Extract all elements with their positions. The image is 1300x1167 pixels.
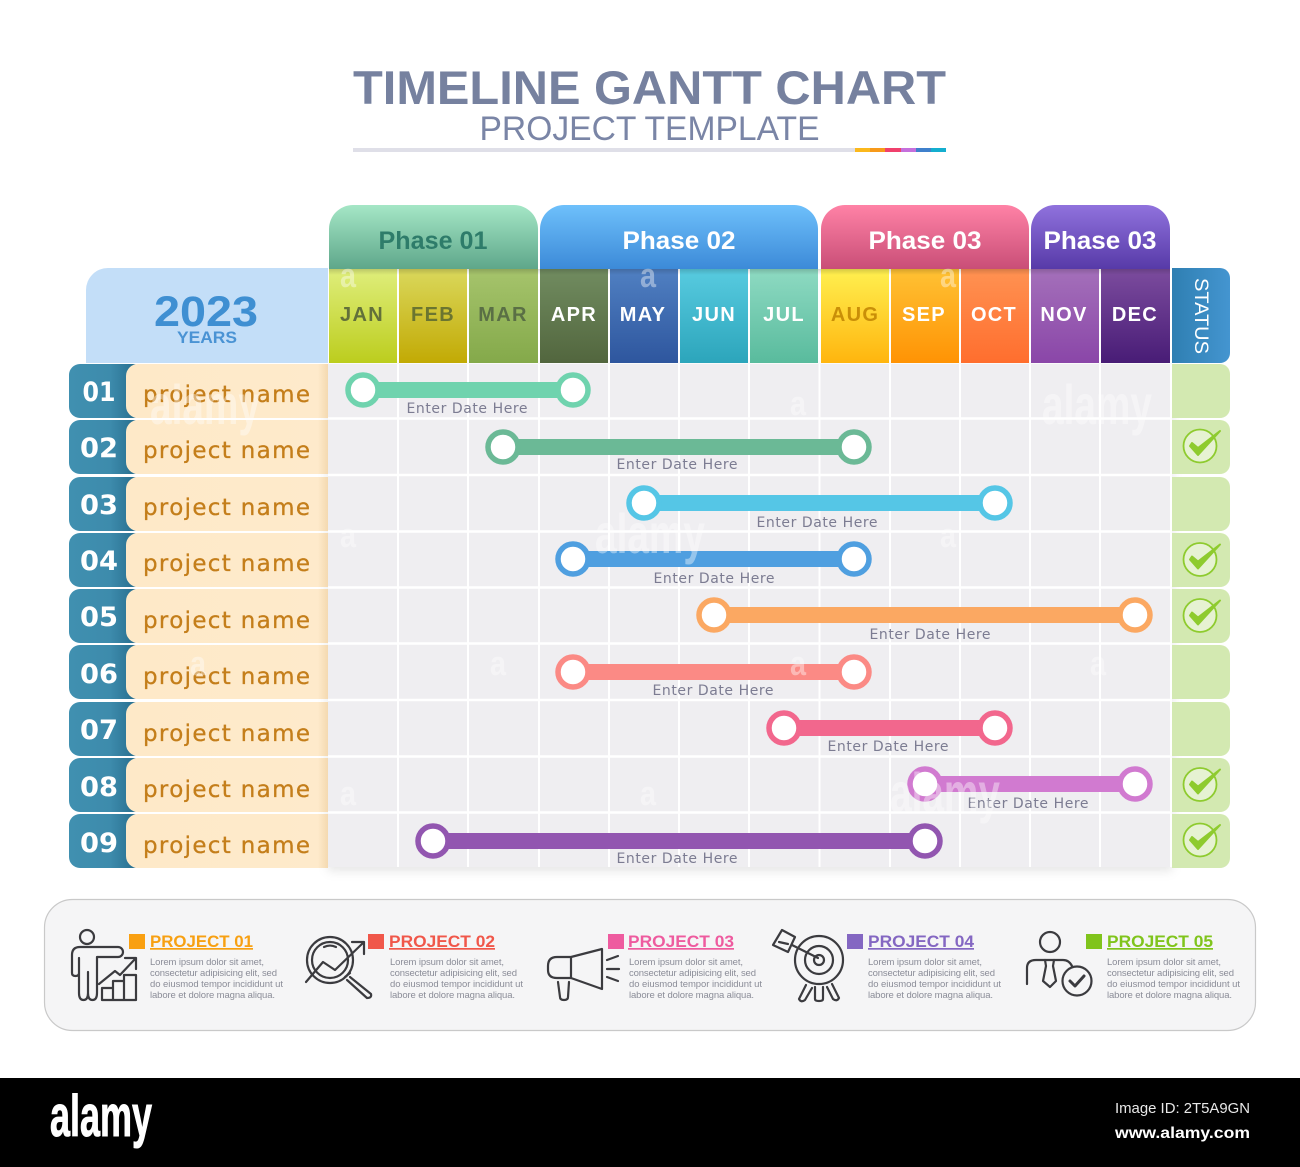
row 07: 07 bbox=[80, 715, 118, 746]
watermarks: a bbox=[640, 257, 657, 295]
bar row 07 bbox=[769, 713, 1010, 755]
row 05 bbox=[69, 589, 328, 643]
jun bbox=[680, 269, 748, 363]
watermarks: a bbox=[640, 775, 657, 813]
icon: target with arrow bbox=[773, 930, 843, 1001]
phase 03 bbox=[821, 205, 1029, 269]
gantt chart bbox=[69, 205, 1230, 868]
row 08: 08 bbox=[80, 772, 118, 803]
jul: JUL bbox=[763, 304, 805, 326]
heading: PROJECT 03 bbox=[628, 932, 734, 951]
description: Lorem ipsum dolor sit amet, bbox=[390, 957, 504, 968]
row 01 bbox=[69, 364, 328, 418]
row 02 bbox=[69, 420, 328, 474]
description: consectetur adipisicing elit, sed bbox=[868, 968, 995, 979]
jul bbox=[750, 269, 818, 363]
icon: magnifier with trend bbox=[306, 937, 371, 998]
row 09 bbox=[69, 814, 328, 868]
description: labore et dolore magna aliqua. bbox=[1107, 990, 1232, 1001]
colour square bbox=[368, 934, 384, 949]
watermarks: a bbox=[340, 517, 357, 555]
description: labore et dolore magna aliqua. bbox=[390, 990, 515, 1001]
row 04: project name bbox=[143, 551, 310, 577]
icon: person with check bbox=[1027, 932, 1092, 996]
bar row 02: Enter Date Here bbox=[616, 457, 738, 473]
description: do eiusmod tempor incididunt ut bbox=[1107, 979, 1240, 990]
bar row 03: Enter Date Here bbox=[756, 515, 878, 531]
sep bbox=[891, 269, 959, 363]
watermarks: a bbox=[1090, 645, 1107, 683]
row 05: project name bbox=[143, 608, 310, 634]
description: consectetur adipisicing elit, sed bbox=[390, 968, 517, 979]
bar row 08 bbox=[910, 769, 1150, 812]
row 01: project name bbox=[143, 382, 310, 408]
description: consectetur adipisicing elit, sed bbox=[150, 968, 277, 979]
panel: year bbox=[86, 268, 328, 363]
row 09: project name bbox=[143, 833, 310, 859]
description: Lorem ipsum dolor sit amet, bbox=[150, 957, 264, 968]
aug bbox=[821, 269, 889, 363]
legend item: project 03 bbox=[548, 932, 762, 1001]
row 03: 03 bbox=[80, 490, 118, 521]
dec bbox=[1101, 269, 1170, 363]
bar row 06 bbox=[558, 657, 869, 699]
footer logo: alamy bbox=[50, 1084, 152, 1149]
gantt bars bbox=[348, 375, 1150, 867]
row 06: project name bbox=[143, 664, 310, 690]
bar row 04: Enter Date Here bbox=[654, 571, 774, 587]
heading: PROJECT 02 bbox=[389, 932, 495, 951]
month headers bbox=[329, 269, 1170, 363]
heading: PROJECT 05 bbox=[1107, 932, 1213, 951]
row 04 bbox=[69, 533, 328, 587]
phase 01: Phase 01 bbox=[378, 227, 488, 255]
watermarks: a bbox=[340, 257, 357, 295]
phase 01 bbox=[329, 205, 538, 269]
description: Lorem ipsum dolor sit amet, bbox=[1107, 957, 1221, 968]
bar row 05: Enter Date Here bbox=[870, 627, 990, 643]
may bbox=[610, 269, 678, 363]
colour square bbox=[847, 934, 863, 949]
colour square bbox=[608, 934, 624, 949]
phase 02: Phase 02 bbox=[622, 227, 736, 255]
watermarks: a bbox=[790, 645, 807, 683]
apr bbox=[540, 269, 608, 363]
watermarks bbox=[150, 257, 1152, 824]
row 05: 05 bbox=[80, 602, 118, 633]
phase 03 second: Phase 03 bbox=[1044, 227, 1156, 255]
nov: NOV bbox=[1040, 304, 1088, 326]
icon: megaphone bbox=[548, 949, 619, 1000]
description: consectetur adipisicing elit, sed bbox=[629, 968, 756, 979]
row 08 bbox=[69, 758, 328, 812]
description: Lorem ipsum dolor sit amet, bbox=[868, 957, 982, 968]
watermarks: a bbox=[490, 645, 507, 683]
row 06 bbox=[69, 645, 328, 699]
description: do eiusmod tempor incididunt ut bbox=[390, 979, 523, 990]
mar bbox=[469, 269, 538, 363]
description: do eiusmod tempor incididunt ut bbox=[868, 979, 1001, 990]
year number: 2023 bbox=[154, 288, 258, 336]
row 03 bbox=[69, 477, 328, 531]
bar row 07: Enter Date Here bbox=[828, 739, 948, 755]
watermarks: alamy bbox=[890, 761, 1000, 824]
phase shadow over months bbox=[329, 269, 1170, 275]
title block bbox=[353, 61, 946, 152]
legend item: project 02 bbox=[306, 932, 523, 1001]
status cells bbox=[1172, 364, 1230, 868]
feb bbox=[399, 269, 467, 363]
row 09: 09 bbox=[80, 828, 118, 859]
bar row 09 bbox=[418, 826, 940, 867]
sep: SEP bbox=[902, 304, 946, 326]
aug: AUG bbox=[831, 304, 879, 326]
description: labore et dolore magna aliqua. bbox=[150, 990, 275, 1001]
legend background bbox=[44, 900, 1256, 1030]
title: TIMELINE GANTT CHART bbox=[353, 61, 946, 114]
phase 03: Phase 03 bbox=[868, 227, 982, 255]
bar row 08: Enter Date Here bbox=[968, 796, 1088, 812]
heading: PROJECT 04 bbox=[868, 932, 975, 951]
check row 08 bbox=[1184, 768, 1220, 801]
legend item: project 01 bbox=[72, 930, 283, 1001]
footer bar bbox=[0, 1078, 1300, 1167]
image id: Image ID: 2T5A9GN bbox=[1115, 1100, 1250, 1117]
may: MAY bbox=[620, 304, 666, 326]
description: Lorem ipsum dolor sit amet, bbox=[629, 957, 743, 968]
jan bbox=[329, 269, 397, 363]
watermarks: a bbox=[940, 257, 957, 295]
nov bbox=[1031, 269, 1099, 363]
status header: STATUS bbox=[1190, 278, 1211, 354]
icon: presenter with chart bbox=[72, 930, 136, 1000]
legend item: project 05 bbox=[1027, 932, 1240, 1001]
watermarks: alamy bbox=[1042, 373, 1152, 436]
check row 09 bbox=[1184, 824, 1220, 856]
bar row 04 bbox=[558, 544, 869, 587]
title underline with colour strip bbox=[353, 148, 946, 152]
check row 04 bbox=[1184, 543, 1220, 576]
row 04: 04 bbox=[80, 546, 118, 577]
watermarks: a bbox=[940, 517, 957, 555]
oct: OCT bbox=[971, 304, 1017, 326]
description: do eiusmod tempor incididunt ut bbox=[629, 979, 762, 990]
row 07: project name bbox=[143, 721, 310, 747]
bar row 06: Enter Date Here bbox=[652, 683, 774, 699]
row labels bbox=[69, 364, 328, 868]
phase 02 bbox=[540, 205, 818, 269]
check row 02 bbox=[1184, 430, 1220, 462]
bar row 09: Enter Date Here bbox=[616, 851, 738, 867]
apr: APR bbox=[551, 304, 597, 326]
colour square bbox=[129, 934, 145, 949]
check row 05 bbox=[1184, 599, 1220, 632]
phase headers bbox=[329, 205, 1170, 269]
watermarks: alamy bbox=[595, 502, 705, 565]
row 08: project name bbox=[143, 777, 310, 803]
status column bbox=[1172, 364, 1230, 868]
years label: YEARS bbox=[177, 328, 237, 347]
row 02: project name bbox=[143, 438, 310, 464]
panel: project legend bbox=[44, 900, 1256, 1030]
colour square bbox=[1086, 934, 1102, 949]
bar row 01 bbox=[348, 375, 588, 417]
watermarks: alamy bbox=[150, 373, 260, 436]
description: do eiusmod tempor incididunt ut bbox=[150, 979, 283, 990]
jan: JAN bbox=[340, 304, 384, 326]
description: labore et dolore magna aliqua. bbox=[868, 990, 993, 1001]
bar row 03 bbox=[629, 488, 1010, 531]
grid background bbox=[328, 364, 1171, 867]
heading: PROJECT 01 bbox=[150, 932, 253, 951]
subtitle: PROJECT TEMPLATE bbox=[480, 110, 820, 148]
bar row 01: Enter Date Here bbox=[406, 401, 528, 417]
oct bbox=[961, 269, 1029, 363]
row 06: 06 bbox=[80, 659, 118, 690]
phase 03 second bbox=[1031, 205, 1170, 269]
watermarks: a bbox=[190, 645, 207, 683]
footer url: www.alamy.com bbox=[1114, 1125, 1250, 1142]
row 01: 01 bbox=[82, 377, 116, 408]
row 07 bbox=[69, 702, 328, 756]
description: labore et dolore magna aliqua. bbox=[629, 990, 754, 1001]
mar: MAR bbox=[478, 304, 528, 326]
row 03: project name bbox=[143, 495, 310, 521]
feb: FEB bbox=[411, 304, 455, 326]
jun: JUN bbox=[692, 304, 736, 326]
dec: DEC bbox=[1112, 304, 1158, 326]
row 02: 02 bbox=[80, 433, 118, 464]
legend item: project 04 bbox=[773, 930, 1001, 1001]
status header bbox=[1172, 268, 1230, 363]
description: consectetur adipisicing elit, sed bbox=[1107, 968, 1234, 979]
watermarks: a bbox=[340, 775, 357, 813]
bar row 02 bbox=[488, 432, 869, 473]
bar row 05 bbox=[699, 600, 1150, 643]
watermarks: a bbox=[790, 385, 807, 423]
